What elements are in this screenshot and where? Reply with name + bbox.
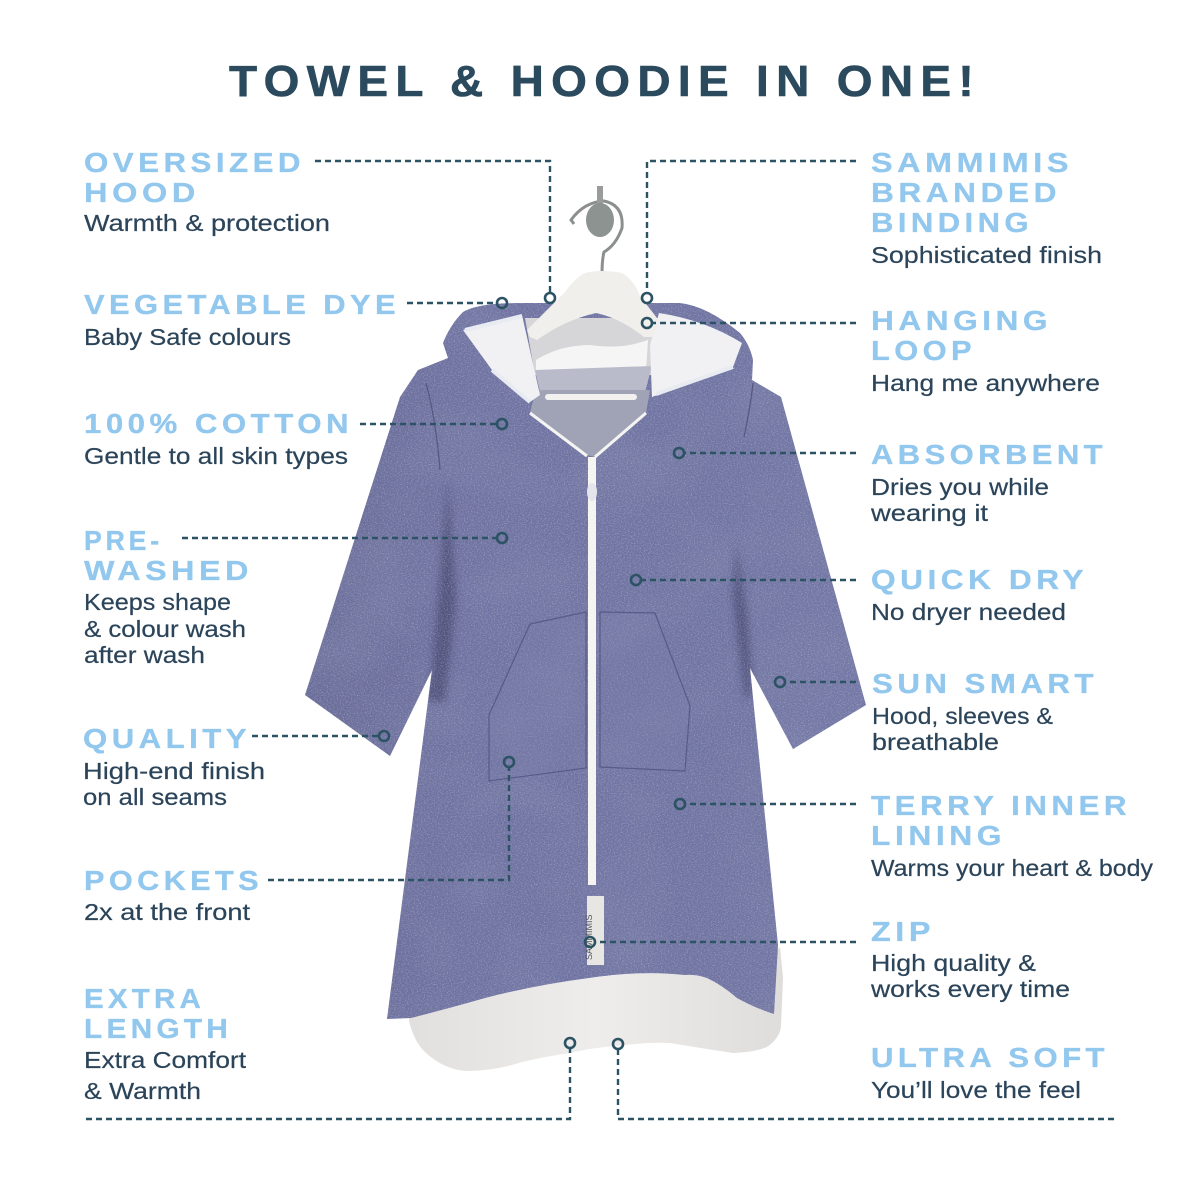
leader: vegetable dye — [407, 298, 507, 308]
leader: oversized hood — [315, 161, 555, 303]
feature: terry inner lining: TERRY INNER — [871, 790, 1131, 821]
zip label — [584, 896, 604, 965]
neck label band — [535, 366, 652, 392]
neck opening terry — [530, 390, 650, 457]
leader: zip — [585, 937, 856, 947]
feature: terry inner lining: Warms your heart & body — [871, 855, 1154, 881]
feature: extra length — [84, 983, 247, 1104]
right pocket — [600, 612, 690, 771]
fabric weave texture — [300, 300, 870, 1030]
feature: oversized hood — [84, 147, 330, 236]
feature: sun smart — [872, 668, 1098, 755]
leader: terry lining — [675, 799, 856, 809]
feature: absorbent — [870, 439, 1107, 526]
feature: 100% cotton: Gentle to all skin types — [84, 443, 348, 469]
feature: ultra soft: ULTRA SOFT — [871, 1042, 1109, 1073]
leader: pre-washed — [182, 533, 507, 543]
feature: sun smart: SUN SMART — [872, 668, 1098, 699]
leader: extra length — [86, 1038, 575, 1119]
feature: extra length: EXTRA — [84, 983, 205, 1014]
leader: ultra soft — [613, 1039, 1114, 1119]
feature: quick dry — [871, 564, 1088, 625]
feature: pre-washed: WASHED — [84, 555, 253, 586]
zip label: SAMMIMIS — [584, 914, 594, 960]
feature: oversized hood: HOOD — [84, 177, 200, 208]
feature: ultra soft — [871, 1042, 1109, 1103]
feature: sammimis branded binding: BRANDED — [871, 177, 1061, 208]
leader: pockets — [268, 757, 514, 880]
left pocket — [489, 612, 586, 781]
leader: branded binding — [642, 161, 856, 303]
leader: cotton — [360, 419, 507, 429]
feature: sammimis branded binding: Sophisticated finish — [871, 242, 1102, 268]
feature: ultra soft: You’ll love the feel — [871, 1077, 1081, 1103]
feature: terry inner lining — [871, 790, 1154, 881]
feature: vegetable dye: Baby Safe colours — [84, 324, 291, 350]
feature: zip: High quality & — [871, 950, 1036, 976]
feature: zip: ZIP — [871, 916, 935, 947]
feature: 100% cotton: 100% COTTON — [84, 408, 353, 439]
feature: pre-washed: & colour wash — [84, 616, 246, 642]
feature: quality: on all seams — [83, 784, 227, 810]
leader: sun smart — [775, 677, 856, 687]
feature: hanging loop: Hang me anywhere — [871, 370, 1100, 396]
feature: 100% cotton — [84, 408, 353, 469]
feature: pockets: POCKETS — [84, 865, 263, 896]
feature: extra length: LENGTH — [84, 1013, 232, 1044]
feature: hanging loop — [871, 305, 1100, 396]
feature: hanging loop: LOOP — [871, 335, 976, 366]
feature: extra length: & Warmth — [84, 1078, 201, 1104]
feature: absorbent: ABSORBENT — [871, 439, 1107, 470]
feature: pockets — [84, 865, 263, 925]
feature: pockets: 2x at the front — [84, 899, 251, 925]
feature: quick dry: QUICK DRY — [871, 564, 1088, 595]
leader lines and markers — [86, 161, 1114, 1119]
hood lining right — [650, 313, 742, 397]
feature: oversized hood: Warmth & protection — [84, 210, 330, 236]
feature: sammimis branded binding: BINDING — [871, 207, 1033, 238]
feature: quality: High-end finish — [83, 758, 265, 784]
feature: quality: QUALITY — [83, 723, 251, 754]
feature: quick dry: No dryer needed — [871, 599, 1066, 625]
feature: pre-washed: PRE- — [84, 525, 163, 556]
hood inner back — [525, 318, 660, 375]
sleeve shadows — [426, 480, 752, 702]
feature: vegetable dye — [84, 289, 400, 350]
feature: vegetable dye: VEGETABLE DYE — [84, 289, 400, 320]
leader: hanging loop — [642, 318, 856, 328]
title: TOWEL & HOODIE IN ONE! — [229, 57, 981, 106]
hanger hook — [571, 186, 622, 274]
feature: oversized hood: OVERSIZED — [84, 147, 305, 178]
terry inside hood back — [536, 340, 648, 372]
feature: zip — [870, 916, 1070, 1002]
leader: quick dry — [631, 575, 856, 585]
fabric mottling — [300, 300, 870, 1030]
feature: terry inner lining: LINING — [871, 820, 1006, 851]
feature: sammimis branded binding: SAMMIMIS — [871, 147, 1073, 178]
feature: pre-washed: after wash — [84, 642, 205, 668]
feature: absorbent: wearing it — [870, 500, 989, 526]
zip — [530, 413, 646, 885]
feature: sammimis branded binding — [871, 147, 1102, 268]
leader: quality — [252, 731, 389, 741]
feature: absorbent: Dries you while — [871, 474, 1049, 500]
feature: sun smart: breathable — [872, 729, 999, 755]
feature: hanging loop: HANGING — [871, 305, 1052, 336]
feature: zip: works every time — [870, 976, 1070, 1002]
shoulder seams — [426, 383, 753, 470]
branded binding — [465, 316, 733, 402]
leader: absorbent — [674, 448, 856, 458]
feature: pre-washed: Keeps shape — [84, 589, 231, 615]
lining hem — [409, 947, 783, 1071]
product photo: hooded towel on hanger — [300, 186, 870, 1071]
feature: quality — [83, 723, 265, 810]
feature: sun smart: Hood, sleeves & — [872, 703, 1053, 729]
blue garment body — [305, 303, 866, 1019]
feature: pre-washed — [84, 525, 253, 668]
hood lining left — [463, 315, 540, 402]
plastic hanger — [527, 271, 660, 340]
feature: extra length: Extra Comfort — [84, 1047, 247, 1073]
